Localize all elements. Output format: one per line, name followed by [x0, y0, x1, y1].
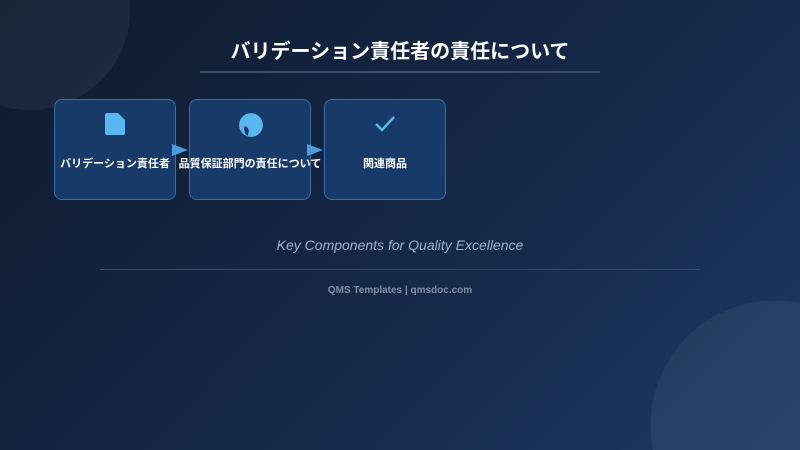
label: 品質保証部門の責任について	[179, 158, 321, 170]
label: 関連商品	[363, 158, 407, 170]
card: QA dept	[189, 99, 311, 200]
card: related products	[324, 99, 446, 200]
icon: globe	[239, 113, 263, 137]
title: バリデーション責任者の責任について	[230, 41, 570, 63]
subtitle: Key Components for Quality Excellence	[277, 237, 523, 253]
icon: document	[105, 113, 125, 135]
footer: QMS Templates | qmsdoc.com	[328, 285, 472, 296]
arrow 2	[307, 144, 323, 156]
label: バリデーション責任者	[60, 158, 170, 170]
arrow 1	[172, 144, 188, 156]
icon: check	[375, 116, 395, 132]
card: validation manager	[54, 99, 176, 200]
